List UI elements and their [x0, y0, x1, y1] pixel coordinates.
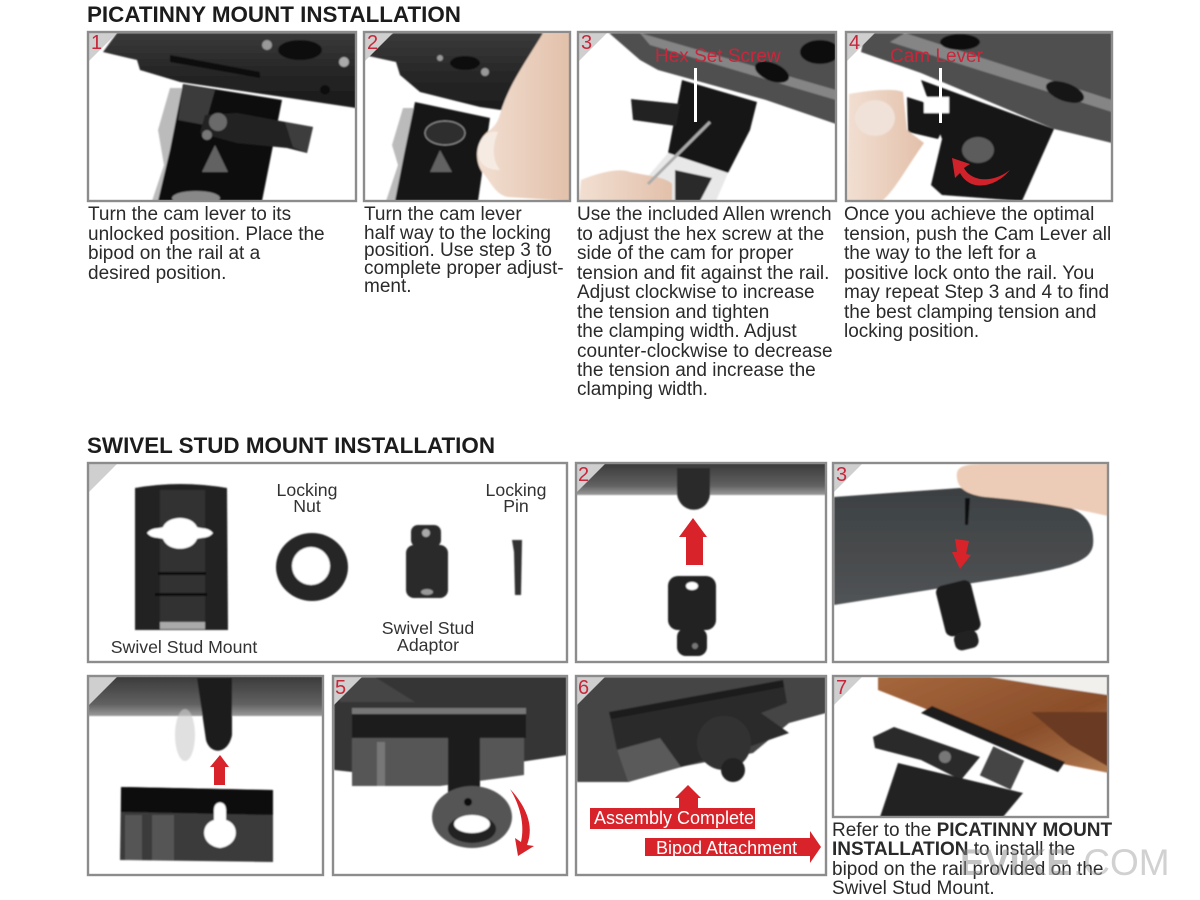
corner tab with step number 2: 2 [367, 32, 378, 54]
text: step 2 instructions: ment. [364, 276, 412, 297]
corner tab with step number 4: 4 [849, 32, 860, 54]
panel: Picatinny step 3 [578, 32, 840, 201]
text: step 4 instructions: locking position. [844, 321, 979, 342]
photo: stud aligned under stock [576, 463, 826, 656]
text: step 3 instructions: tension and fit against the rail. [577, 263, 829, 284]
photo: locking nut threaded onto stud [334, 677, 567, 848]
label: Locking Pin: Pin [503, 496, 529, 516]
arrow: red up arrow to assembly [675, 785, 701, 810]
corner tab with step number 5: 5 [335, 677, 346, 699]
panel: swivel stud step 5 [333, 676, 567, 875]
panel: swivel stud parts [88, 463, 567, 662]
corner tab with step number 7: 7 [836, 677, 847, 699]
panel: swivel stud step 4 [88, 676, 323, 875]
text: step 7 instructions: Swivel Stud Mount. [832, 878, 995, 899]
part: swivel stud mount [135, 484, 228, 630]
text: step 4 instructions: tension, push the Cam Lever all [844, 224, 1111, 245]
text: step 3 instructions: the clamping width. Adjust [577, 321, 797, 342]
text: step 1 instructions: bipod on the rail at a [88, 243, 261, 264]
corner tab with step number 6: 6 [578, 677, 589, 699]
text: step 4 instructions: may repeat Step 3 and 4 to find [844, 282, 1109, 303]
corner tab with step number 3: 3 [581, 32, 592, 54]
text: step 7 instructions: to install the [968, 839, 1075, 860]
corner tab with step number 3 [578, 32, 608, 62]
text: step 4 instructions: the best clamping tension and [844, 302, 1096, 323]
panel: swivel stud step 2 [576, 463, 826, 662]
text: step 3 instructions: Adjust clockwise to increase [577, 282, 815, 303]
callout: Assembly Complete: Assembly Complete [594, 808, 754, 828]
panel: Picatinny step 1 [88, 32, 356, 205]
arrow: red down arrow [952, 539, 971, 569]
corner tab with step number 7 [833, 676, 863, 706]
corner tab with step number 1: 1 [91, 32, 102, 54]
text: step 1 instructions: Turn the cam lever to its [88, 204, 291, 225]
text: step 2 instructions: Turn the cam lever [364, 204, 522, 225]
corner tab with step number 2 [576, 463, 606, 493]
text: step 3 instructions: side of the cam for proper [577, 243, 794, 264]
label: Swivel Stud Adaptor: Adaptor [397, 635, 459, 655]
text: step 1 instructions: desired position. [88, 263, 226, 284]
part: locking nut [276, 533, 348, 601]
text: step 3 instructions: clamping width. [577, 379, 708, 400]
panel: swivel stud step 3 [833, 463, 1108, 662]
label: Swivel Stud Adaptor: Swivel Stud [382, 618, 474, 638]
arrow: red up arrow [210, 755, 229, 785]
photo: hand turning cam lever [364, 33, 570, 201]
watermark: EVIKE.COM [960, 842, 1170, 883]
arrow: red curved rotation arrow [952, 158, 1010, 185]
heading: Swivel stud mount installation: SWIVEL STUD MOUNT INSTALLATION [87, 433, 495, 458]
callout: Hex Set Screw [655, 46, 781, 122]
text: step 4 instructions: Once you achieve the optimal [844, 204, 1094, 225]
corner tab with step number 6 [576, 676, 606, 706]
corner tab with step number 3: 3 [836, 464, 847, 486]
callout: Hex Set Screw: Hex Set Screw [655, 46, 781, 67]
label: Swivel Stud Mount: Swivel Stud Mount [111, 637, 257, 657]
text: step 3 instructions: counter-clockwise to decrease [577, 341, 833, 362]
corner tab with step number 5 [333, 676, 363, 706]
arrow: red curved arrow [510, 789, 534, 856]
text: step 4 instructions: the way to the left for a [844, 243, 1037, 264]
photo: thumb pushing cam lever [847, 33, 1112, 201]
text: step 2 instructions: half way to the locking [364, 223, 551, 244]
text: step 3 instructions: Use the included Allen wrench [577, 204, 832, 225]
corner tab with step number 2: 2 [578, 464, 589, 486]
corner tab with step number 3 [833, 463, 863, 493]
part: swivel stud adaptor [406, 525, 448, 598]
panel: swivel stud step 6 [576, 676, 826, 875]
text: step 2 instructions: position. Use step 3 to [364, 240, 552, 261]
text: step 2 instructions: complete proper adjust- [364, 258, 564, 279]
text: step 7 instructions: bipod on the rail provided on the [832, 859, 1103, 880]
callout: Cam Lever: Cam Lever [890, 46, 984, 67]
callout: Cam Lever [890, 46, 984, 123]
photo: bipod with cam lever unlocked [103, 33, 356, 205]
label: Locking Pin: Locking [486, 480, 546, 500]
text: step 1 instructions: unlocked position. Place the [88, 224, 325, 245]
callout: Bipod Attachment arrow: Bipod Attachment [656, 838, 797, 858]
panel: Picatinny step 2 [364, 32, 570, 201]
label: Locking Nut: Locking [277, 480, 337, 500]
text: step 7 instructions: Refer to the [832, 820, 937, 841]
callout: Bipod Attachment arrow [645, 831, 821, 863]
part: locking pin [512, 540, 522, 595]
corner tab with step number 2 [364, 32, 394, 62]
text: step 3 instructions: the tension and increase the [577, 360, 816, 381]
text: step 7 instructions: INSTALLATION [832, 839, 968, 860]
corner tab with step number 4 [846, 32, 876, 62]
label: Locking Nut: Nut [293, 496, 321, 516]
photo: stud inserted in stock with pin [834, 464, 1108, 653]
photo: mount aligned under stud [88, 676, 323, 862]
photo: bipod mounted under wooden stock [873, 677, 1109, 817]
text: step 7 instructions: PICATINNY MOUNT [937, 820, 1113, 841]
arrow: red up arrow [679, 518, 707, 565]
heading: Picatinny mount installation: PICATINNY MOUNT INSTALLATION [87, 2, 461, 27]
text: step 4 instructions: positive lock onto the rail. You [844, 263, 1094, 284]
photo: assembled mount on stock [577, 677, 826, 782]
text: step 3 instructions: the tension and tighten [577, 302, 769, 323]
photo: Allen wrench adjusting hex screw [579, 33, 840, 201]
corner tab with step number 1 [88, 32, 118, 62]
panel: swivel stud step 7 [833, 676, 1109, 817]
watermark: EVIKE.COM: .COM [1073, 842, 1170, 883]
text: step 3 instructions: to adjust the hex screw at the [577, 224, 824, 245]
watermark: EVIKE.COM: EVIKE [960, 842, 1071, 883]
panel: Picatinny step 4 [846, 32, 1112, 201]
